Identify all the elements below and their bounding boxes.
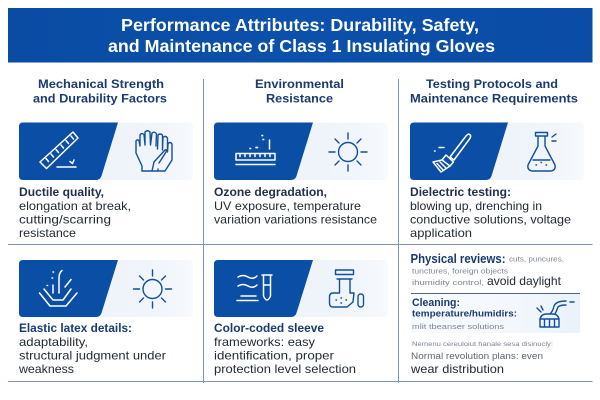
icon: paint brush (433, 134, 471, 172)
text: elastic latex details: weakness (18, 362, 74, 376)
heading: mechanical strength (33, 77, 167, 106)
text: physical reviews: tunctures, foreign objects (412, 266, 508, 276)
text: elastic latex details: structural judgment under (19, 348, 166, 362)
heading: mechanical strength: and Durability Factors (33, 92, 167, 106)
icon: scrub brush (537, 301, 574, 327)
text: elastic latex details (18, 321, 166, 376)
card: elastic latex and sun (19, 260, 193, 317)
icon: latex splash (40, 270, 77, 306)
text: elastic latex details: adaptability, (19, 335, 88, 349)
text: ozone degradation: UV exposure, temperature (214, 199, 361, 213)
card: brush and flask (410, 122, 584, 180)
heading: environmental resistance: Environmental (255, 77, 344, 91)
text: ductile quality: elongation at break, (19, 199, 131, 213)
text: dielectric testing: conductive solutions, voltage (410, 212, 571, 226)
heading: testing protocols: Maintenance Requirements (410, 92, 578, 106)
text: revolution plans: Normal revolution plans: even (411, 351, 543, 361)
text: ductile quality: resistance (19, 226, 76, 240)
panel: cleaning: mlit tbeanser solutions (412, 322, 504, 331)
text: physical reviews: cuts, puncures, (509, 254, 564, 264)
icon: sun (134, 270, 172, 308)
icon: sample bottle (330, 270, 364, 307)
text: elastic latex details: Elastic latex details: (19, 321, 132, 335)
text: physical reviews: Physical reviews: (410, 252, 506, 266)
card: ozone and sun (214, 122, 388, 180)
text: physical reviews: avoid daylight (487, 274, 562, 288)
text: revolution plans: Nemenu cereuloiut hanale sesa disinucly: (412, 341, 553, 348)
text: revolution plans: wear distribution (410, 362, 504, 376)
text: color-coded sleeve: frameworks: easy (214, 335, 315, 349)
title banner: and Maintenance of Class 1 Insulating Gloves (108, 36, 495, 56)
text: ozone degradation: variation variations resistance (214, 212, 377, 226)
text: revolution plans (410, 341, 553, 376)
text: dielectric testing (410, 185, 571, 240)
text: ozone degradation: Ozone degradation, (214, 185, 327, 199)
heading: environmental resistance: Resistance (266, 92, 333, 106)
text: dielectric testing: Dielectric testing: (410, 185, 511, 199)
text: color-coded sleeve: protection level selection (214, 362, 356, 376)
icon: water levels and tube (237, 275, 272, 300)
text: physical reviews: ihumidity control, (412, 278, 484, 287)
panel: cleaning: Cleaning: (412, 297, 460, 309)
text: color-coded sleeve: identification, proper (214, 348, 334, 362)
text: color-coded sleeve (214, 321, 356, 376)
text: ductile quality: Ductile quality, (19, 185, 104, 199)
heading: testing protocols (410, 77, 578, 106)
card: ruler and gloves (19, 122, 193, 180)
heading: mechanical strength: Mechanical Strength (38, 77, 164, 91)
title banner (8, 8, 592, 62)
text: ozone degradation (214, 185, 377, 226)
icon: gloves (136, 131, 172, 171)
icon: ruler (40, 132, 78, 168)
text: dielectric testing: blowing up, drenching in (410, 199, 542, 213)
title banner: Performance Attributes: Durability, Safety, (121, 15, 479, 35)
icon: flask (528, 132, 556, 171)
icon: sun (329, 133, 367, 171)
icon: ozone strip (236, 136, 275, 164)
panel: cleaning: temperature/humidirs: (412, 308, 517, 320)
heading: testing protocols: Testing Protocols and (426, 77, 558, 91)
heading: environmental resistance (255, 77, 344, 106)
text: dielectric testing: application (410, 226, 472, 240)
text: color-coded sleeve: Color-coded sleeve (214, 321, 324, 335)
text: ductile quality (19, 185, 131, 240)
card: water and test tube (214, 260, 388, 317)
text: physical reviews (410, 252, 564, 288)
text: ductile quality: cutting/scarring (19, 212, 111, 226)
panel: cleaning (411, 294, 580, 333)
